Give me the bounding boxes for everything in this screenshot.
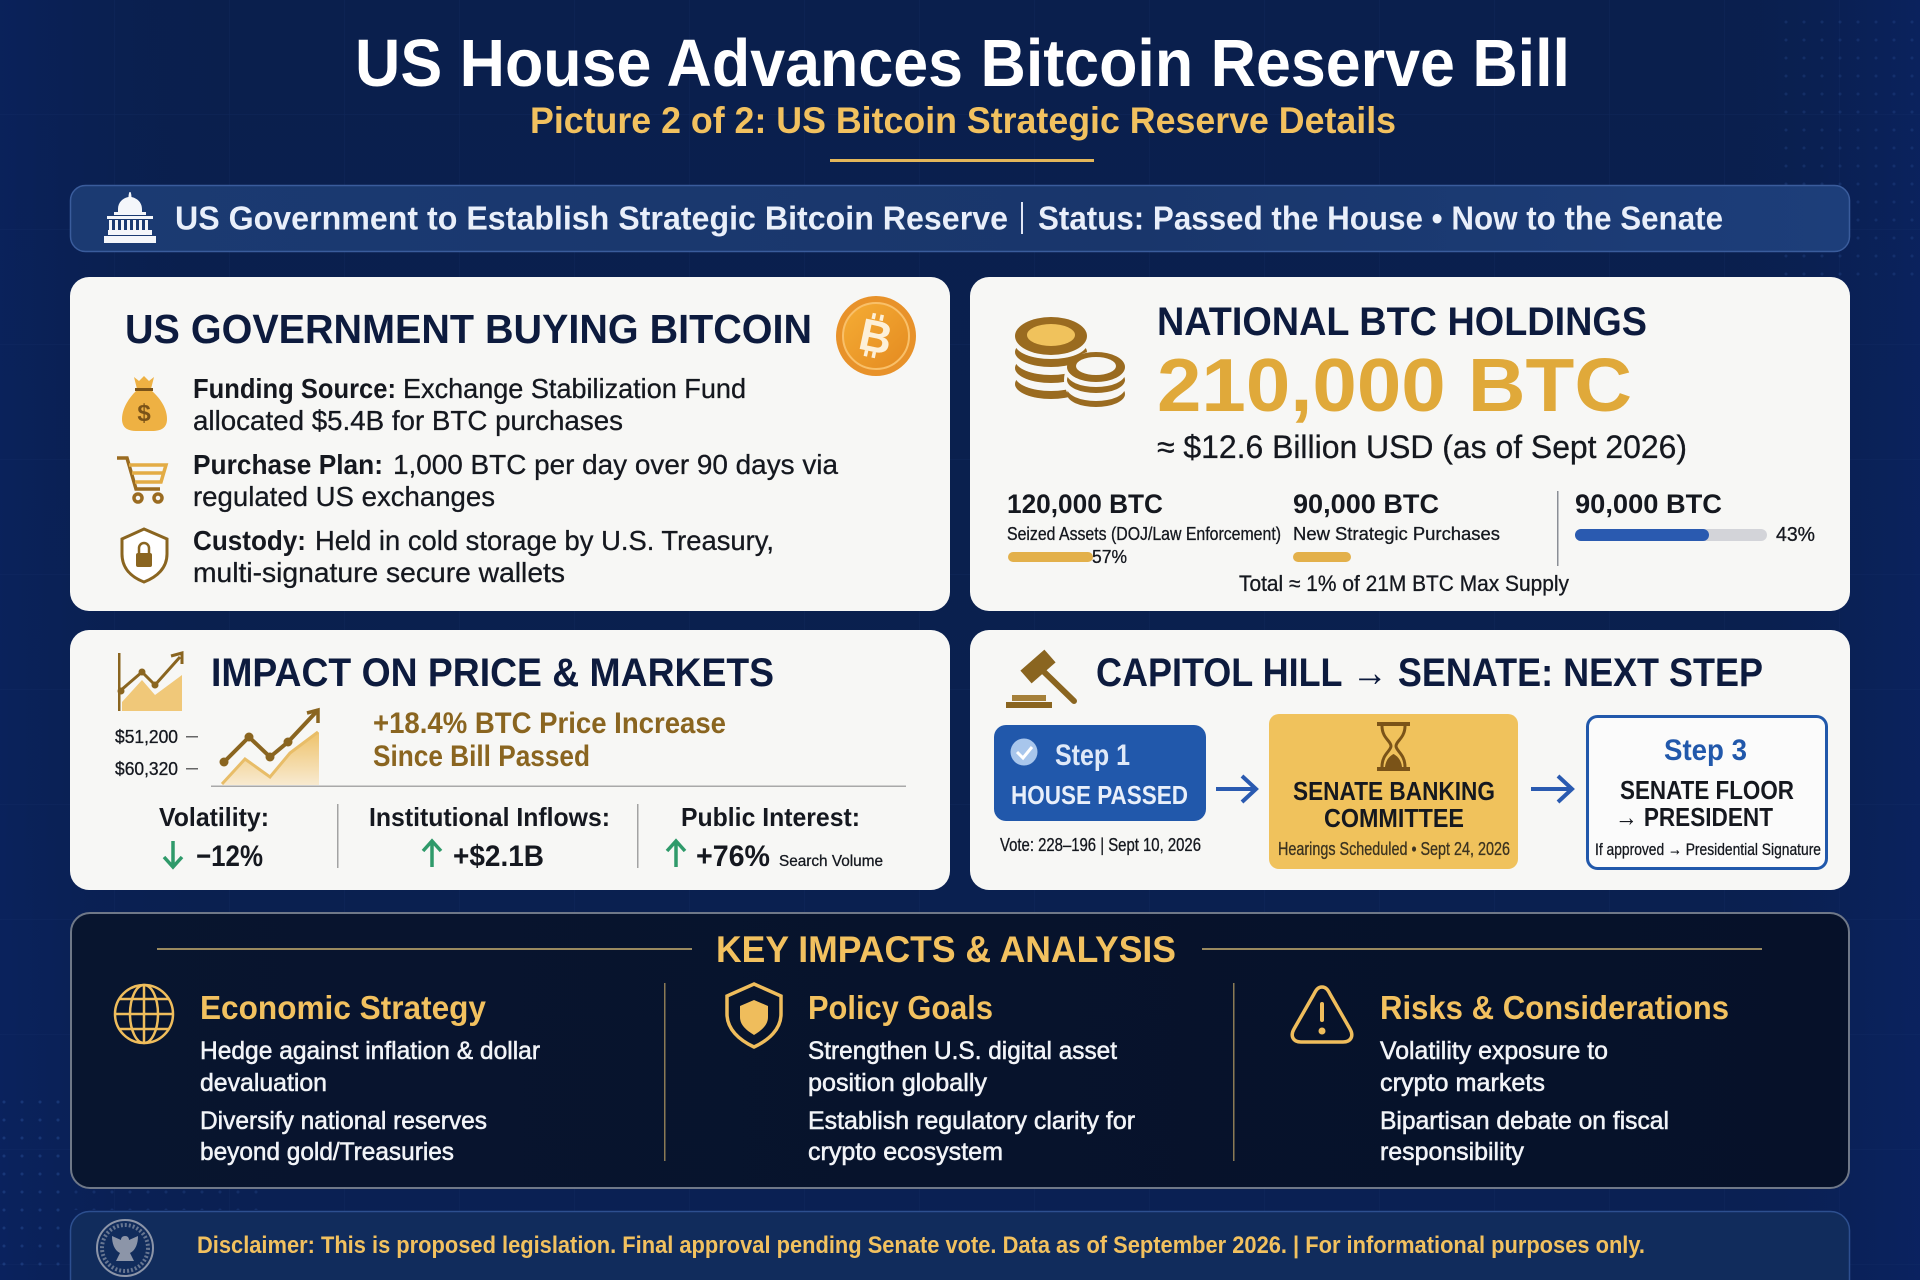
icon: hourglass xyxy=(1377,722,1410,771)
icon: shopping cart xyxy=(117,458,166,502)
icon: warning triangle xyxy=(1292,987,1352,1042)
heading: NATIONAL BTC HOLDINGS xyxy=(1157,300,1647,344)
divider line xyxy=(1557,491,1558,566)
total supply note: Total ≈ 1% of 21M BTC Max Supply xyxy=(1239,571,1569,596)
step 3 box: → PRESIDENT xyxy=(1615,802,1773,832)
column: policy goals: Establish regulatory clarity for xyxy=(808,1107,1135,1135)
price increase callout: Since Bill Passed xyxy=(373,740,590,773)
purchase plan text: 1,000 BTC per day over 90 days via xyxy=(393,449,838,480)
stat: seized assets xyxy=(1007,489,1281,567)
icon: trend chart xyxy=(118,653,182,711)
vote note: Vote: 228–196 | Sept 10, 2026 xyxy=(1000,835,1201,855)
disclaimer text: Disclaimer: This is proposed legislation. Final approval pending Senate vote. Data as of September 2026. | For informational purposes only. xyxy=(197,1232,1645,1259)
step 3 box: SENATE FLOOR xyxy=(1620,775,1794,805)
heading: US GOVERNMENT BUYING BITCOIN xyxy=(125,306,812,352)
funding source text xyxy=(193,373,746,436)
icon: shield xyxy=(727,984,781,1047)
column: economic strategy: beyond gold/Treasuries xyxy=(200,1138,454,1166)
icon: coin stacks xyxy=(1015,317,1128,409)
stat: institutional inflows: Institutional Inflows: xyxy=(369,802,610,832)
step 2 box xyxy=(1269,714,1518,869)
stat: institutional inflows: +$2.1B xyxy=(453,840,544,873)
custody text: Custody: xyxy=(193,525,306,556)
funding source text: allocated $5.4B for BTC purchases xyxy=(193,405,623,436)
custody text xyxy=(193,525,774,588)
step 3 box: If approved → Presidential Signature xyxy=(1595,840,1821,859)
column: policy goals: crypto ecosystem xyxy=(808,1138,1003,1166)
step 2 box: Hearings Scheduled • Sept 24, 2026 xyxy=(1278,839,1510,859)
funding source text: Exchange Stabilization Fund xyxy=(403,373,746,404)
column: economic strategy: Diversify national reserves xyxy=(200,1107,487,1135)
stat: public interest: Public Interest: xyxy=(681,802,860,832)
icon: bitcoin coin xyxy=(836,296,916,376)
step 2 box: COMMITTEE xyxy=(1324,803,1464,833)
icon: capitol building xyxy=(104,192,156,243)
banner separator xyxy=(1021,202,1023,234)
column: risks and considerations: Bipartisan debate on fiscal xyxy=(1380,1107,1669,1135)
price increase callout xyxy=(373,707,726,773)
funding source text: Funding Source: xyxy=(193,373,396,404)
price increase callout: +18.4% BTC Price Increase xyxy=(373,707,726,740)
column: risks and considerations: Volatility exposure to xyxy=(1380,1037,1608,1065)
purchase plan text: regulated US exchanges xyxy=(193,481,495,512)
stat: new strategic purchases: New Strategic Purchases xyxy=(1293,524,1500,544)
subtitle: Picture 2 of 2: US Bitcoin Strategic Reserve Details xyxy=(530,100,1396,141)
column: economic strategy xyxy=(115,985,540,1166)
icon: bitcoin coin: B xyxy=(855,308,897,365)
stat: public interest xyxy=(667,802,883,873)
custody text: Held in cold storage by U.S. Treasury, xyxy=(315,525,774,556)
stat: institutional inflows xyxy=(369,802,610,873)
column: policy goals: Strengthen U.S. digital asset xyxy=(808,1037,1117,1065)
column: risks and considerations: crypto markets xyxy=(1380,1069,1545,1097)
panel: impact on price and markets xyxy=(70,630,950,890)
column: risks and considerations: responsibility xyxy=(1380,1138,1524,1166)
panel: US government buying bitcoin xyxy=(70,277,950,611)
panel: capitol hill to senate next step xyxy=(970,630,1850,890)
price labels: $60,320 xyxy=(115,759,178,779)
icon: gavel xyxy=(1006,650,1074,708)
icon: shield with lock xyxy=(122,529,167,582)
title: US House Advances Bitcoin Reserve Bill xyxy=(355,26,1570,101)
column: policy goals: position globally xyxy=(808,1069,987,1097)
heading: CAPITOL HILL → SENATE: NEXT STEP xyxy=(1096,651,1763,695)
column: economic strategy: devaluation xyxy=(200,1069,327,1097)
purchase plan text: Purchase Plan: xyxy=(193,449,383,480)
panel: key impacts and analysis xyxy=(71,913,1849,1188)
stat: public interest: +76% xyxy=(696,840,770,873)
big number: 210,000 BTC xyxy=(1157,343,1632,427)
step 1 box xyxy=(994,725,1206,821)
stat: 43 percent bar xyxy=(1575,489,1815,546)
price labels xyxy=(115,727,198,779)
banner text: headline: US Government to Establish Strategic Bitcoin Reserve xyxy=(175,200,1008,236)
column: policy goals xyxy=(727,984,1135,1166)
panel: national BTC holdings xyxy=(970,277,1850,611)
column: policy goals: Policy Goals xyxy=(808,989,993,1026)
stat: seized assets: 57% xyxy=(1092,547,1127,567)
stat: volatility: Volatility: xyxy=(159,802,269,832)
custody text: multi-signature secure wallets xyxy=(193,557,565,588)
price chart xyxy=(220,710,319,785)
column: economic strategy: Economic Strategy xyxy=(200,989,487,1026)
column: risks and considerations xyxy=(1292,987,1729,1166)
icon: money bag: $ xyxy=(137,400,151,427)
stat: volatility: −12% xyxy=(196,840,263,873)
stat: 43 percent bar: 43% xyxy=(1776,524,1815,546)
icon: government seal xyxy=(97,1220,153,1276)
price labels: $51,200 xyxy=(115,727,178,747)
banner text: status: Status: Passed the House • Now to the Senate xyxy=(1038,200,1723,236)
banner xyxy=(70,186,1850,252)
heading: KEY IMPACTS & ANALYSIS xyxy=(716,929,1176,970)
title underline xyxy=(830,159,1094,162)
icon: money bag xyxy=(122,376,167,431)
stat: public interest: Search Volume xyxy=(779,853,883,870)
stat: seized assets: 120,000 BTC xyxy=(1007,489,1163,519)
stat: seized assets: Seized Assets (DOJ/Law Enforcement) xyxy=(1007,524,1281,544)
panel: disclaimer footer xyxy=(70,1212,1850,1280)
step 3 box xyxy=(1588,716,1826,868)
arrow: step 2 to step 3 xyxy=(1531,776,1572,802)
stat: volatility xyxy=(159,802,269,873)
column: risks and considerations: Risks & Considerations xyxy=(1380,989,1729,1026)
step 1 box: HOUSE PASSED xyxy=(1011,780,1188,810)
usd value: ≈ $12.6 Billion USD (as of Sept 2026) xyxy=(1157,429,1687,465)
stat: 43 percent bar: 90,000 BTC xyxy=(1575,489,1722,519)
step 1 box: Step 1 xyxy=(1055,739,1130,772)
arrow: step 1 to step 2 xyxy=(1216,776,1256,802)
step 2 box: SENATE BANKING xyxy=(1293,776,1495,806)
step 3 box: Step 3 xyxy=(1664,734,1747,767)
purchase plan text xyxy=(193,449,838,512)
heading: IMPACT ON PRICE & MARKETS xyxy=(211,651,774,695)
stat: new strategic purchases: 90,000 BTC xyxy=(1293,489,1439,519)
stat: new strategic purchases xyxy=(1293,489,1500,562)
column: economic strategy: Hedge against inflation & dollar xyxy=(200,1037,540,1065)
icon: globe xyxy=(115,985,173,1043)
